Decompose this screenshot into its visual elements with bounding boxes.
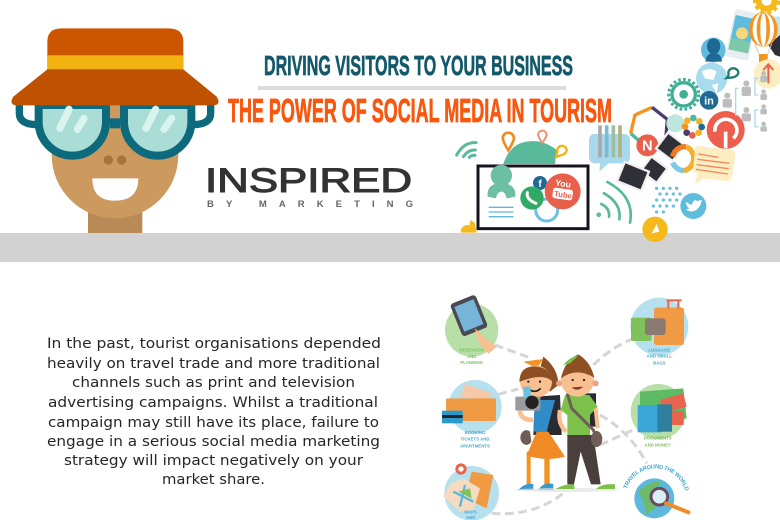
social media cluster illustration xyxy=(457,0,780,242)
body paragraph: engage in a serious social media marketing xyxy=(47,433,380,450)
item: luggage and bags: AND SMALL xyxy=(647,354,672,359)
item: documents and money xyxy=(631,384,687,448)
icon: speech bubble with bars xyxy=(589,125,630,172)
item: luggage and bags: LUGGAGE xyxy=(648,347,670,352)
monitor screen xyxy=(478,166,588,229)
character: tourist with hat and glasses xyxy=(11,28,219,233)
icon: dot triangle xyxy=(652,187,682,214)
logo: inspired by marketing: INSPIRED xyxy=(205,162,412,200)
icon: linkedin: in xyxy=(704,95,714,107)
item: travel around the world: TRAVEL AROUND THE WORLD xyxy=(623,464,689,490)
body paragraph: campaign may still have its place, failure to xyxy=(48,414,379,431)
icon: yellow badge bottom xyxy=(642,217,668,242)
logo: inspired by marketing: BY MARKETING xyxy=(207,199,413,210)
travel planning illustration xyxy=(442,295,690,520)
character: boy with backpack xyxy=(515,354,618,492)
item: research and planning xyxy=(445,294,498,365)
title: driving visitors: DRIVING VISITORS TO YOUR BUSINESS xyxy=(264,50,573,81)
item: booking tickets xyxy=(442,380,502,448)
icon: donut chart xyxy=(673,147,694,171)
icon: message bubble xyxy=(693,146,735,184)
item: booking tickets: TICKETS AND xyxy=(461,436,489,441)
icon: facebook xyxy=(533,176,547,190)
icon: wifi right xyxy=(598,182,631,223)
icon: hexagon ring xyxy=(631,107,667,142)
item: booking tickets: APARTMENTS xyxy=(460,443,490,448)
icon: hot air balloon xyxy=(749,12,778,62)
icon: pinterest xyxy=(707,111,745,149)
item: travel around the world xyxy=(623,464,690,518)
item: maps: MAPS xyxy=(464,509,477,514)
item: documents and money: DOCUMENTS xyxy=(644,435,672,440)
icon: smartphone xyxy=(725,9,758,61)
icon: red circle N: N xyxy=(642,139,653,155)
icon: skype xyxy=(536,199,558,221)
body paragraph: strategy will impact negatively on your xyxy=(64,452,363,469)
icon: orange gear top xyxy=(755,0,779,13)
icon: world map with pins xyxy=(503,131,567,164)
icon: teal flower xyxy=(666,114,684,132)
icon: profile avatar xyxy=(488,165,515,217)
heading divider xyxy=(258,86,566,90)
body paragraph: In the past, tourist organisations depended xyxy=(47,335,381,352)
icon: youtube xyxy=(545,173,581,209)
item: research and planning: RESEARCH xyxy=(460,348,484,353)
grey divider band xyxy=(0,233,780,262)
icon: wifi left xyxy=(457,143,476,157)
body paragraph: heavily on travel trade and more traditional xyxy=(47,355,380,372)
icon: up arrow badge xyxy=(754,59,780,89)
dashed connectors xyxy=(492,338,647,514)
body paragraph: market share. xyxy=(162,471,265,488)
icon: phone xyxy=(520,186,544,210)
icon: teal gear xyxy=(669,79,699,109)
item: maps: AND xyxy=(466,515,475,520)
icon: people network xyxy=(723,71,767,132)
icon: coloured dot ring xyxy=(682,115,705,139)
icon: facebook: f xyxy=(538,179,542,190)
icon: dark card behind balloon xyxy=(768,35,780,57)
icon: youtube: Tube xyxy=(554,189,572,201)
body paragraph: channels such as print and television xyxy=(72,374,355,391)
icon: linkedin xyxy=(700,91,718,110)
icon: red circle N xyxy=(636,134,658,156)
icon: yellow gear bottom xyxy=(461,220,477,233)
item: maps xyxy=(443,463,499,520)
body paragraph xyxy=(47,335,381,488)
body paragraph: advertising campaigns. Whilst a traditional xyxy=(48,394,378,411)
logo: inspired by marketing xyxy=(205,162,413,210)
icon: globe xyxy=(696,63,738,94)
item: documents and money: AND MONEY xyxy=(644,443,671,448)
icon: photos xyxy=(617,132,685,191)
item: luggage and bags xyxy=(630,298,688,365)
character: girl with camera xyxy=(515,357,565,490)
icon: person avatar xyxy=(701,38,726,62)
icon: pale panel behind balloon xyxy=(773,17,780,37)
item: booking tickets: BOOKING xyxy=(465,430,486,435)
item: research and planning: AND xyxy=(467,354,476,359)
icon: twitter xyxy=(680,193,706,219)
icon: youtube: You xyxy=(555,178,572,190)
item: luggage and bags: BAGS xyxy=(653,360,666,365)
item: research and planning: PLANNING xyxy=(460,360,484,365)
